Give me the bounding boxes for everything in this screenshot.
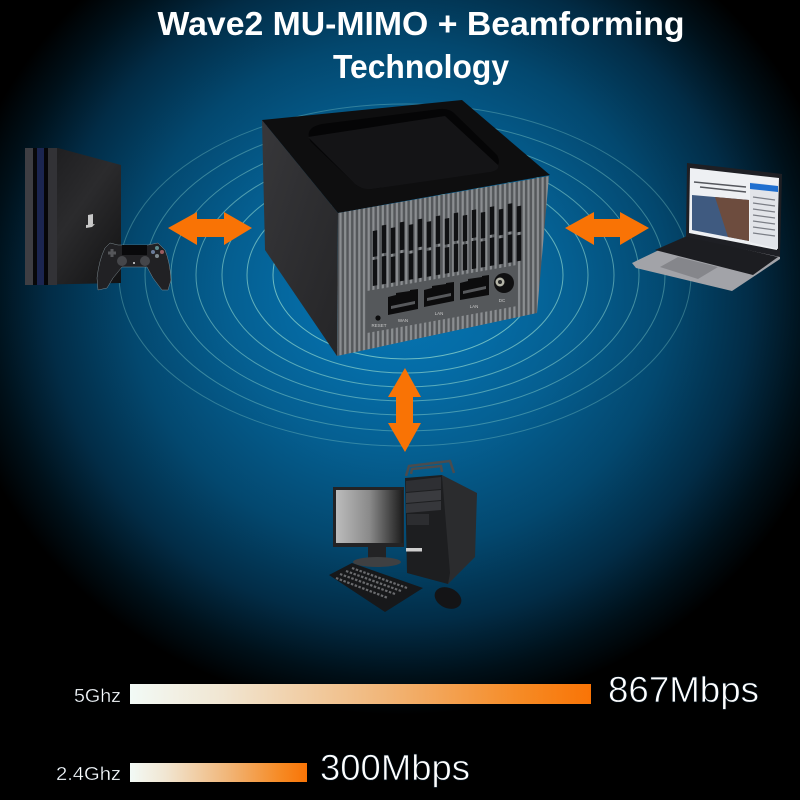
router top face — [262, 100, 550, 213]
5Ghz value: 867Mbps — [608, 669, 759, 710]
monitor screen — [336, 490, 403, 543]
5Ghz label: 5Ghz — [74, 686, 121, 706]
tower front — [405, 475, 450, 584]
console stripes — [25, 148, 57, 285]
laptop base — [632, 237, 780, 291]
laptop keyboard — [655, 236, 778, 275]
2.4Ghz label: 2.4Ghz — [56, 764, 121, 784]
router vents — [375, 202, 519, 286]
router top plate — [308, 116, 498, 189]
tower side — [442, 475, 477, 584]
arrow: to laptop — [565, 212, 649, 245]
console logo — [86, 214, 95, 228]
console body — [25, 148, 121, 285]
drive bays — [406, 477, 441, 513]
LAN port 2 — [460, 275, 489, 300]
screen photo — [692, 195, 749, 241]
port labels — [371, 298, 506, 328]
mouse — [431, 583, 465, 613]
laptop screen — [689, 168, 779, 250]
keyboard keys — [336, 568, 407, 598]
reset button — [375, 315, 381, 321]
port labels: WAN — [398, 318, 408, 323]
monitor stand — [368, 547, 386, 560]
2.4Ghz bar — [130, 763, 307, 782]
title: Technology — [333, 48, 510, 85]
screen headline — [694, 182, 746, 192]
5Ghz bar — [130, 684, 591, 704]
router — [262, 100, 550, 356]
router left face — [262, 120, 338, 356]
screen sidebar — [750, 182, 778, 249]
laptop trackpad — [660, 257, 718, 279]
tower handle — [406, 461, 454, 476]
arrow: to desktop — [388, 368, 421, 452]
desktop computer — [329, 461, 477, 613]
monitor base — [353, 557, 401, 567]
port labels: DC — [499, 298, 506, 303]
port labels: LAN — [470, 304, 478, 309]
port labels: LAN — [435, 311, 443, 316]
photo tones — [715, 197, 749, 241]
port labels: RESET — [371, 323, 387, 328]
speed bars — [56, 669, 759, 788]
laptop — [632, 163, 782, 291]
monitor — [333, 487, 404, 547]
LAN port 1 — [424, 282, 454, 307]
keyboard — [329, 563, 423, 612]
title — [158, 5, 684, 85]
arrow: to console — [168, 212, 252, 245]
laptop lid — [686, 163, 782, 257]
signal rings — [119, 104, 691, 446]
title: Wave2 MU-MIMO + Beamforming — [158, 5, 684, 42]
controller — [97, 243, 171, 290]
router top recess — [309, 109, 499, 189]
2.4Ghz value: 300Mbps — [320, 747, 470, 788]
tower badge — [406, 548, 422, 552]
front ports — [407, 514, 429, 525]
DC jack — [494, 273, 514, 293]
WAN port — [388, 289, 418, 315]
router port plate — [367, 265, 517, 333]
router front face — [337, 176, 549, 356]
game console — [25, 148, 171, 290]
